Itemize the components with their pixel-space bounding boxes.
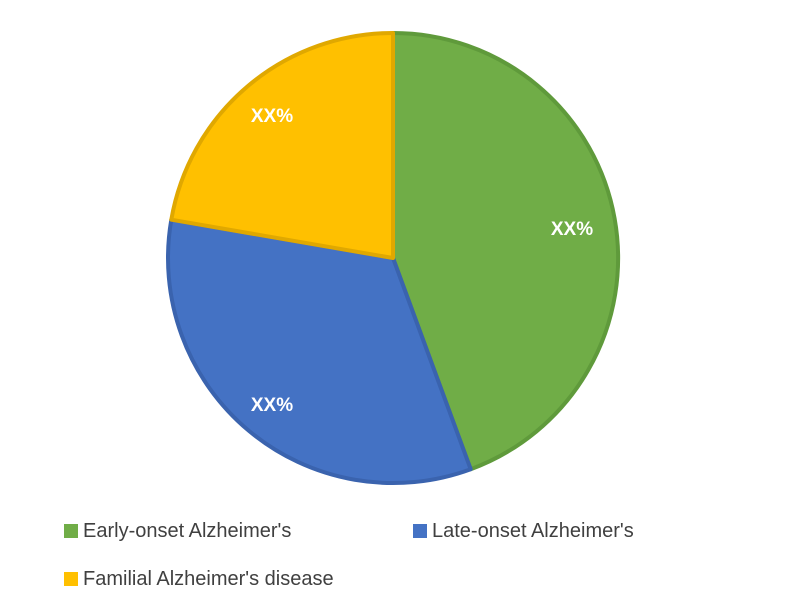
slice: early-onset bbox=[393, 33, 618, 469]
legend: late-onset: Late-onset Alzheimer's bbox=[432, 520, 634, 542]
label: familial value: XX% bbox=[251, 106, 293, 127]
slice: familial bbox=[171, 33, 393, 258]
legend: early-onset: Early-onset Alzheimer's bbox=[83, 520, 291, 542]
label: late-onset value: XX% bbox=[251, 395, 293, 416]
label: early-onset value: XX% bbox=[551, 219, 593, 240]
legend: familial: Familial Alzheimer's disease bbox=[83, 568, 334, 590]
slice: late-onset bbox=[168, 220, 471, 483]
